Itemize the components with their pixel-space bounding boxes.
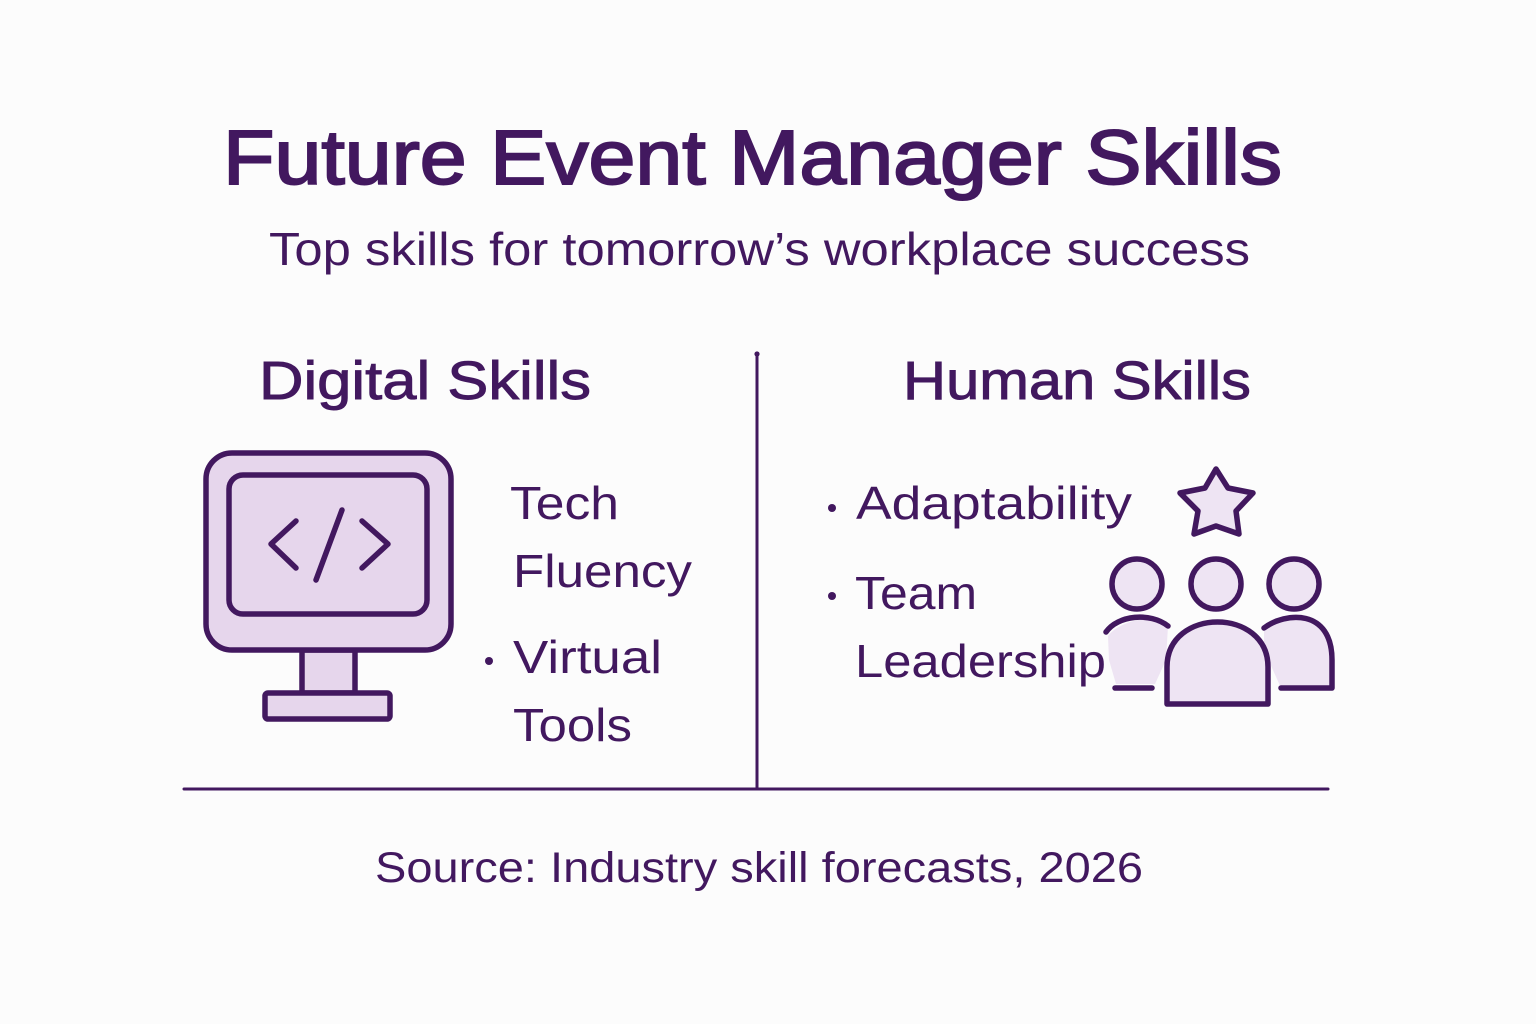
item: virtual tools [485, 631, 662, 751]
list: digital skills [485, 477, 692, 751]
horizontal divider [184, 788, 1328, 790]
source note: Source: Industry skill forecasts, 2026 [375, 844, 1143, 892]
icon: star [1180, 469, 1253, 534]
subtitle: Top skills for tomorrow’s workplace success [269, 223, 1250, 275]
list: human skills [828, 477, 1132, 687]
vertical divider [754, 351, 760, 788]
icon: computer monitor with code [206, 453, 451, 719]
heading: human skills: Human Skills [903, 351, 1251, 411]
item: team leadership [828, 567, 1106, 687]
icon: team of people [1106, 559, 1332, 704]
item: tech fluency [510, 477, 692, 597]
item: virtual tools: Virtual [513, 631, 662, 683]
item: adaptability: Adaptability [856, 477, 1132, 529]
item: tech fluency: Fluency [513, 545, 692, 597]
item: virtual tools: Tools [513, 699, 632, 751]
item: team leadership: Leadership [855, 635, 1106, 687]
item: tech fluency: Tech [510, 477, 619, 529]
heading: digital skills: Digital Skills [259, 351, 591, 411]
title: Future Event Manager Skills [223, 115, 1282, 201]
item: team leadership: Team [855, 567, 977, 619]
